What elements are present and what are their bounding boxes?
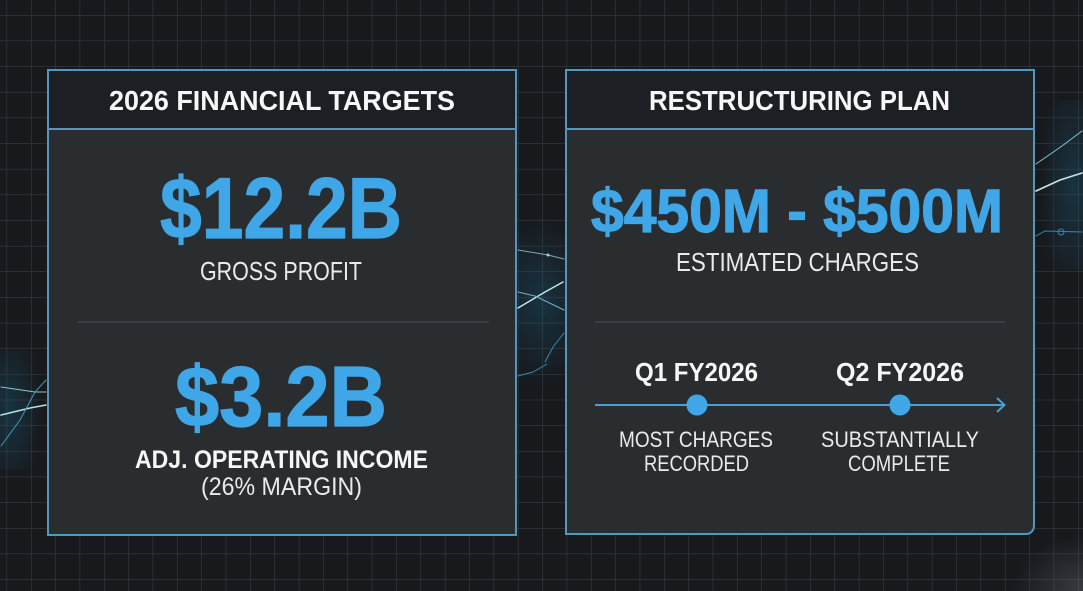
panel: restructuring plan (566, 70, 1034, 534)
metric label: gross profit: GROSS PROFIT (200, 256, 362, 286)
metric label: adjusted operating income: ADJ. OPERATING INCOME (135, 446, 428, 474)
milestone text: substantially complete (821, 427, 979, 476)
milestone dot: Q2 (890, 394, 910, 416)
milestone date: Q1 FY2026: Q1 FY2026 (635, 357, 758, 387)
metric: operating income value: $3.2B (175, 350, 387, 445)
panel header bar (48, 70, 516, 129)
heading: RESTRUCTURING PLAN (649, 85, 950, 116)
background lightning streaks (0, 100, 1083, 470)
panel body (566, 70, 1034, 534)
timeline (595, 357, 1004, 476)
metric: gross profit value: $12.2B (160, 161, 402, 257)
milestone dot: Q1 (686, 394, 708, 416)
timeline arrow (595, 398, 1004, 412)
heading: 2026 FINANCIAL TARGETS (109, 85, 455, 116)
metric label: estimated charges: ESTIMATED CHARGES (676, 247, 919, 277)
panel body (48, 70, 516, 535)
metric note: margin: (26% MARGIN) (201, 473, 362, 501)
panel header bar (566, 70, 1034, 129)
milestone text: substantially complete: COMPLETE (848, 451, 950, 476)
milestone text: most charges recorded (619, 427, 773, 476)
milestone text: most charges recorded: MOST CHARGES (619, 427, 773, 452)
milestone text: substantially complete: SUBSTANTIALLY (821, 427, 979, 452)
milestone text: most charges recorded: RECORDED (644, 451, 749, 476)
metric: estimated charges range: $450M - $500M (591, 177, 1003, 245)
milestone date: Q2 FY2026: Q2 FY2026 (836, 357, 964, 387)
panel: 2026 financial targets (48, 70, 516, 535)
